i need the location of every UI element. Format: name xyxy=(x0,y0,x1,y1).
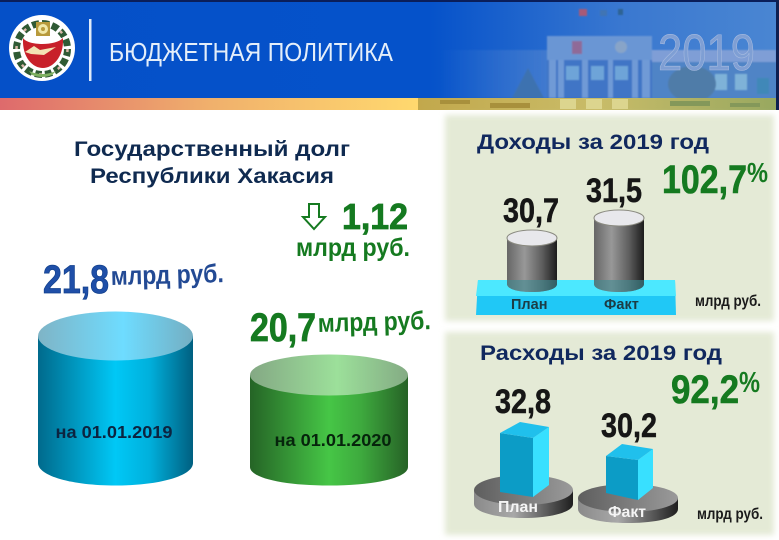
disk: fact xyxy=(578,484,678,523)
emblem xyxy=(9,15,75,81)
bar: fact xyxy=(601,407,657,500)
chart labels xyxy=(511,297,639,313)
value: 2020 debt: млрд руб. xyxy=(317,305,431,338)
value: 2019 debt: 21,8 xyxy=(43,258,109,302)
disk: plan: План xyxy=(498,499,538,516)
income percent: % xyxy=(747,157,768,188)
cylinder: 2020 debt: на 01.01.2020 xyxy=(274,430,392,450)
bar: plan xyxy=(495,383,551,497)
bar: plan: 30,7 xyxy=(503,192,559,230)
income chart xyxy=(476,172,676,315)
header divider xyxy=(89,19,92,81)
debt heading xyxy=(74,137,350,188)
value: 2020 debt xyxy=(250,305,431,350)
debt decrease callout: млрд руб. xyxy=(296,234,410,262)
debt heading: Государственный долг xyxy=(74,137,350,161)
income unit: млрд руб. xyxy=(695,293,761,310)
header title: БЮДЖЕТНАЯ ПОЛИТИКА xyxy=(109,37,394,67)
chart labels: План xyxy=(511,297,547,313)
debt decrease callout xyxy=(296,196,410,262)
expenses heading: Расходы за 2019 год xyxy=(480,341,722,365)
disk: fact: Факт xyxy=(608,504,646,521)
bar: fact: 31,5 xyxy=(586,172,642,210)
debt decrease callout: 1,12 xyxy=(342,196,408,237)
bar: fact: 30,2 xyxy=(601,407,657,445)
expenses percent: % xyxy=(739,367,760,399)
expenses percent: 92,2 xyxy=(671,368,739,412)
bar: fact xyxy=(586,172,644,292)
disk: plan xyxy=(474,475,573,518)
expenses chart xyxy=(474,383,678,523)
cylinder: 2019 debt xyxy=(38,312,193,486)
icon: down arrow xyxy=(303,204,325,229)
income percent: 102,7 xyxy=(662,158,747,202)
cylinder: 2020 debt xyxy=(250,354,408,486)
value: 2019 debt xyxy=(43,258,224,302)
value: 2020 debt: 20,7 xyxy=(250,306,316,350)
header band xyxy=(0,0,779,110)
year label: 2019 xyxy=(658,24,755,81)
cylinder: 2019 debt: на 01.01.2019 xyxy=(56,422,173,442)
bar: plan xyxy=(503,192,559,292)
chart base xyxy=(476,280,676,315)
gradient stripe xyxy=(0,98,776,110)
building photo xyxy=(440,9,776,102)
value: 2019 debt: млрд руб. xyxy=(110,258,224,291)
debt heading: Республики Хакасия xyxy=(90,164,334,188)
bar: plan: 32,8 xyxy=(495,383,551,421)
expenses unit: млрд руб. xyxy=(697,506,763,523)
panel: expenses background xyxy=(445,332,774,535)
chart labels: Факт xyxy=(604,297,639,313)
panel: income background xyxy=(445,115,774,321)
income heading: Доходы за 2019 год xyxy=(477,130,709,154)
